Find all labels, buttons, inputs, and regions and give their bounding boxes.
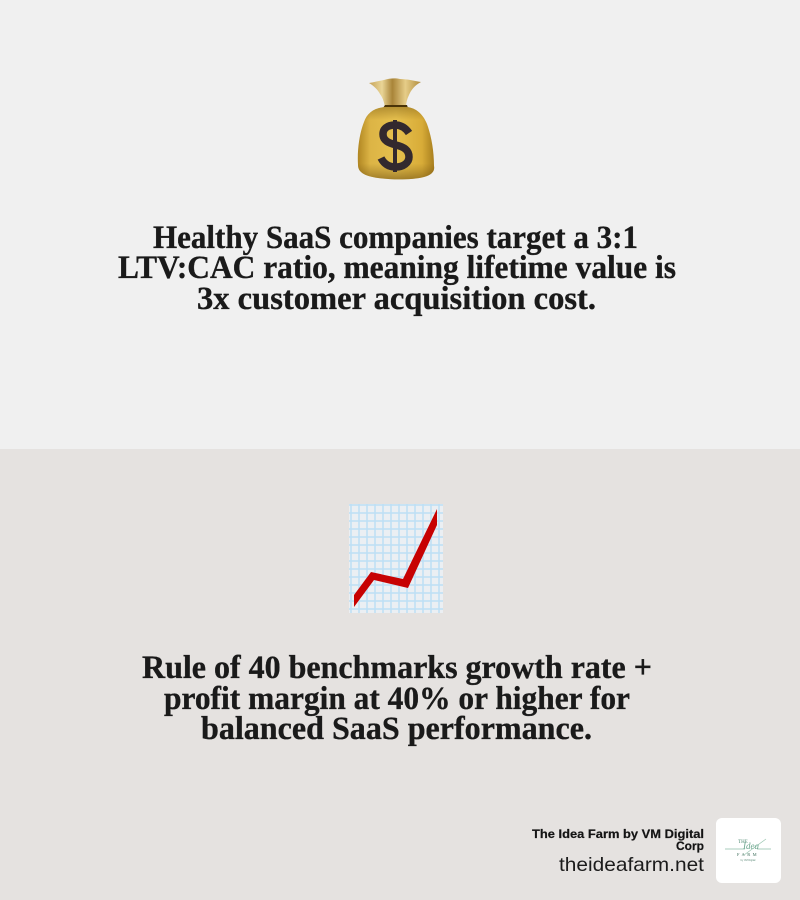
icon: money bag: [358, 78, 434, 179]
heading: Rule of 40 statement: [142, 650, 652, 747]
logo card: Idea: [742, 841, 759, 851]
logo card: by VM Digital: [741, 859, 756, 862]
logo card: [716, 818, 781, 883]
icon: rising chart: [349, 504, 443, 613]
heading: Rule of 40 statement: Rule of 40 benchmarks growth rate +: [142, 650, 652, 686]
panel: Rule of 40: [0, 449, 800, 900]
logo card: FARM: [737, 852, 759, 857]
heading: LTV:CAC statement: [118, 220, 676, 317]
logo card: THE: [738, 840, 748, 845]
heading: Rule of 40 statement: balanced SaaS performance.: [201, 711, 592, 747]
footer: brand block: [532, 818, 781, 883]
brand name: The Idea Farm by VM Digital: [532, 827, 704, 841]
website url: theideafarm.net: [559, 854, 705, 876]
panel: LTV:CAC ratio: [0, 0, 800, 449]
dollar sign: [381, 120, 409, 172]
heading: LTV:CAC statement: 3x customer acquisition cost.: [197, 281, 596, 317]
heading: LTV:CAC statement: Healthy SaaS companies target a 3:1: [153, 220, 638, 256]
brand name: Corp: [676, 839, 704, 853]
brand name: [532, 827, 704, 853]
heading: Rule of 40 statement: profit margin at 40% or higher for: [164, 681, 630, 717]
heading: LTV:CAC statement: LTV:CAC ratio, meaning lifetime value is: [118, 250, 676, 286]
